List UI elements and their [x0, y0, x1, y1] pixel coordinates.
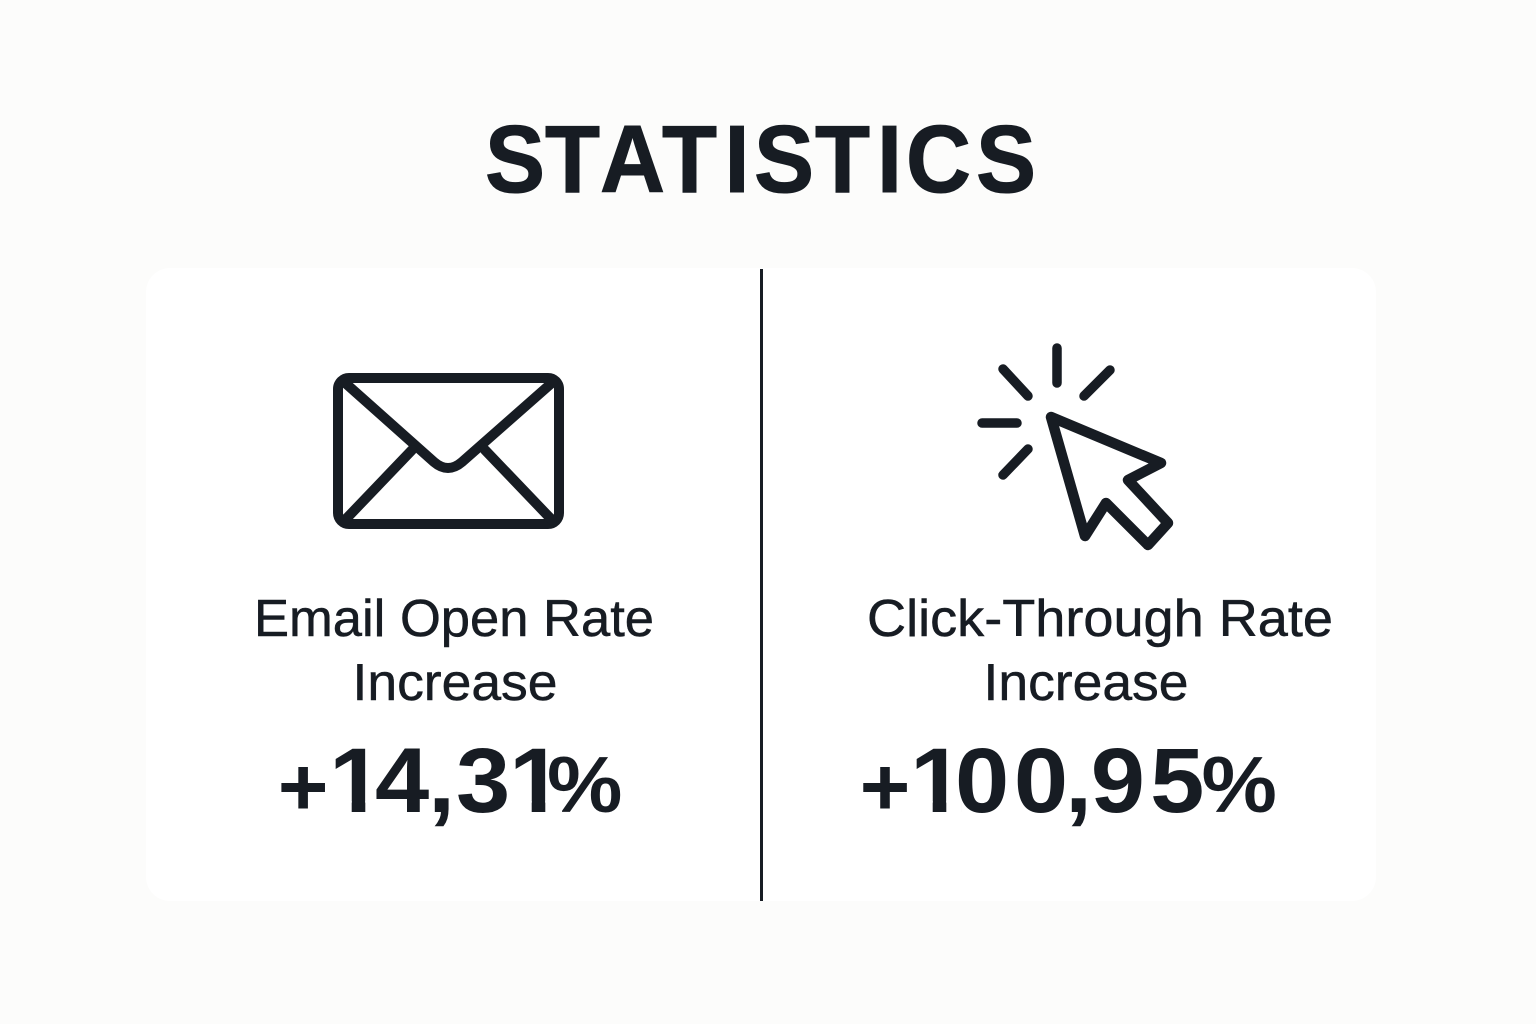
- value: email open rate: [281, 748, 620, 826]
- value: email open rate: 14,31: [329, 730, 563, 832]
- panel: statistics card: [258, 269, 1331, 901]
- icon: cursor click: [982, 348, 1168, 545]
- value: email open rate: %: [547, 740, 622, 829]
- icon: envelope: [338, 378, 559, 524]
- panel: click-through rate: [860, 348, 1333, 832]
- label: click-through rate increase: Click-Through Rate: [867, 590, 1333, 648]
- label: click-through rate increase: Increase: [984, 654, 1188, 712]
- value: click-through rate: %: [1202, 740, 1277, 829]
- value: email open rate: +: [278, 741, 328, 832]
- value: click-through rate: [863, 748, 1275, 826]
- panel: email open rate: [254, 378, 654, 832]
- label: email open rate increase: Increase: [352, 654, 558, 712]
- value: click-through rate: +: [860, 741, 910, 832]
- label: email open rate increase: Email Open Rate: [254, 590, 654, 648]
- title: STATISTICS: [485, 106, 1036, 213]
- divider: [760, 269, 763, 901]
- value: click-through rate: 100,95: [910, 730, 1204, 832]
